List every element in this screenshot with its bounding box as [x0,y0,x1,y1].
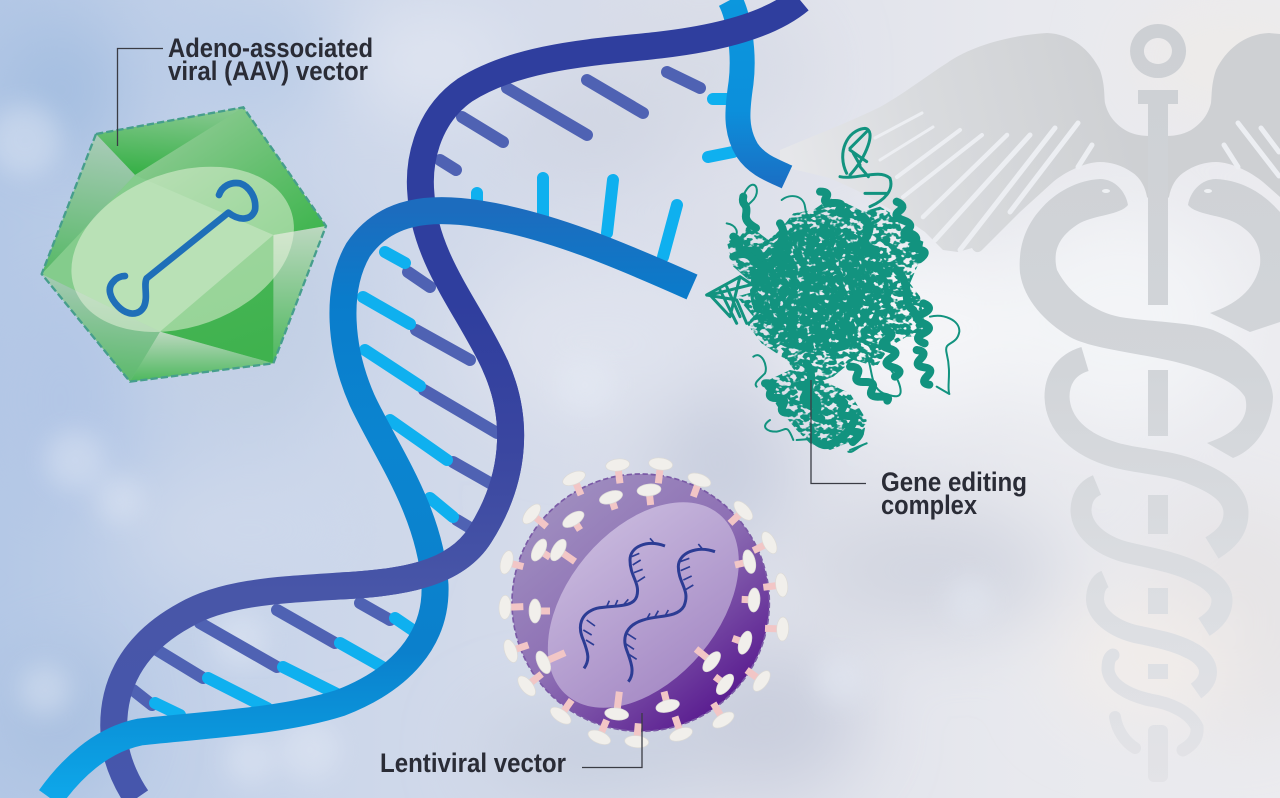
virus outer membrane [512,474,769,731]
callout: gene editing complex label and leader line: complex [881,490,977,520]
AAV inner genome disc [48,137,317,361]
AAV inner DNA dumbbell [110,183,255,314]
protein thin loops and RNA hairpin [707,128,959,452]
caduceus lower coils [1057,359,1236,750]
AAV capsid dashed outline [42,107,326,382]
protein dense core [727,198,930,387]
callout: lentiviral vector label and leader line [380,713,642,778]
callout: AAV label and leader line [118,33,373,146]
virus inner core [510,466,777,744]
AAV vector: green icosahedral capsid [42,107,326,382]
callout: gene editing complex label and leader line: Gene editing [881,467,1027,497]
snake eyes [1102,189,1212,193]
protein lower lobe [762,370,867,450]
callout: AAV label and leader line: viral (AAV) vector [168,56,368,86]
navy strand crossing over blue [340,365,511,586]
caduceus wing right [1166,33,1280,200]
caduceus upper snakes [1020,179,1280,458]
lentiviral vector: purple spiked sphere [498,457,789,749]
RNA strands [580,538,715,682]
protein helices [733,192,930,445]
virus spike proteins [498,457,789,749]
gene editing complex: teal ribbon protein structure [707,128,959,452]
callout: lentiviral vector label and leader line: Lentiviral vector [380,748,566,778]
caduceus medical symbol watermark [780,24,1280,782]
callout: gene editing complex label and leader line [811,380,1027,520]
navy strand [114,0,800,798]
callout: AAV label and leader line: Adeno-associated [168,33,373,63]
blue strand [50,211,692,798]
caduceus ring, bar and staff [1130,24,1186,782]
DNA base-pair rungs, navy side [133,72,700,705]
caduceus wing left [780,33,1150,252]
top cyan strand [730,0,787,177]
AAV capsid facets [42,107,326,382]
protein central mass [750,227,893,353]
DNA double helix [50,0,800,798]
DNA base-pair rungs, cyan side [155,99,733,715]
